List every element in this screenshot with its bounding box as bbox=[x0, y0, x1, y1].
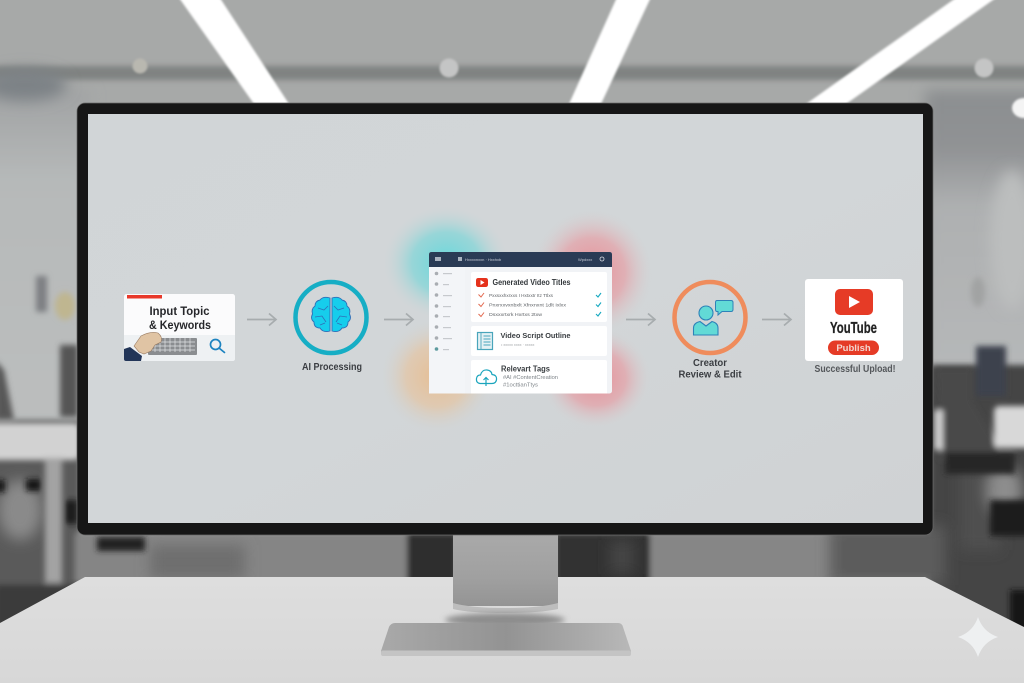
card heading: Relevart Tags bbox=[501, 364, 551, 374]
tag text bbox=[503, 375, 558, 388]
red accent bar bbox=[127, 295, 162, 298]
icon: sparkle watermark bbox=[958, 617, 998, 657]
desk bbox=[0, 577, 1024, 683]
icon: magnifier bbox=[210, 340, 224, 352]
label: successful upload: Successful Upload! bbox=[814, 364, 896, 375]
arrow 4 bbox=[762, 314, 791, 326]
step 5: youtube publish card bbox=[805, 279, 903, 361]
icon: teal checks bbox=[596, 293, 601, 316]
title rows: Pxxsxxhxrxxs I Hxtxxtr Itz Ttlxs bbox=[489, 293, 554, 298]
ceiling lights bbox=[132, 0, 1024, 118]
tag text: #1octtianTtys bbox=[503, 382, 538, 388]
icon: cloud upload bbox=[476, 370, 497, 386]
monitor stand bbox=[381, 535, 631, 656]
tag text: #AI #ContentCreation bbox=[503, 375, 558, 381]
card: relevant tags bbox=[471, 360, 607, 394]
dashboard header bar: Wpdxxx bbox=[578, 257, 592, 262]
step 2: AI processing bbox=[296, 282, 366, 373]
coloured glows behind dashboard bbox=[381, 207, 652, 432]
panel: generated content dashboard bbox=[429, 252, 612, 394]
icon: brain bbox=[312, 297, 350, 332]
icon: person bbox=[694, 306, 718, 335]
arrow 1 bbox=[247, 314, 276, 326]
card heading: Generated Video Titles bbox=[492, 277, 571, 287]
icon: keyboard bbox=[148, 338, 197, 355]
ring bbox=[674, 282, 746, 353]
heading: Input Topic bbox=[150, 304, 210, 318]
card: video script outline bbox=[471, 326, 607, 356]
publish button: Publish bbox=[836, 343, 871, 354]
title rows: Pnxrxxvxnbxlt Xfnxnxnt 1dlt Ixlxx bbox=[489, 302, 567, 308]
icon: document bbox=[478, 332, 492, 350]
screen bbox=[88, 114, 923, 523]
step 4: creator review and edit bbox=[674, 282, 746, 380]
icon: youtube logo bbox=[835, 289, 873, 315]
step 1: input topic and keywords card bbox=[124, 294, 235, 361]
label line 2: Review & Edit bbox=[678, 368, 742, 380]
dashboard header bar bbox=[429, 252, 612, 267]
arrow 3 bbox=[626, 314, 655, 326]
label: AI Processing bbox=[302, 361, 362, 373]
label: Creator bbox=[693, 357, 727, 369]
card heading: Video Script Outline bbox=[500, 331, 570, 340]
monitor bbox=[77, 103, 933, 535]
sidebar bbox=[429, 267, 465, 394]
heading line 2: & Keywords bbox=[149, 318, 211, 332]
icon: speech bubble bbox=[716, 300, 733, 315]
small caption: • xxxxx xxxx · xxxxx bbox=[501, 343, 534, 347]
title rows bbox=[489, 293, 567, 317]
card: generated video titles bbox=[471, 272, 607, 322]
icon: youtube small bbox=[476, 278, 488, 287]
icon: red checks bbox=[478, 293, 484, 316]
dashboard header bar: Hxxxxnxxn · Hxxhxb bbox=[465, 257, 502, 262]
icon: hand bbox=[124, 332, 162, 361]
title rows: Dsxxxrtxrk Hxrtxs 2txw bbox=[489, 312, 543, 317]
ring bbox=[296, 282, 366, 353]
wordmark: YouTube bbox=[830, 320, 877, 337]
arrow 2 bbox=[384, 314, 413, 326]
